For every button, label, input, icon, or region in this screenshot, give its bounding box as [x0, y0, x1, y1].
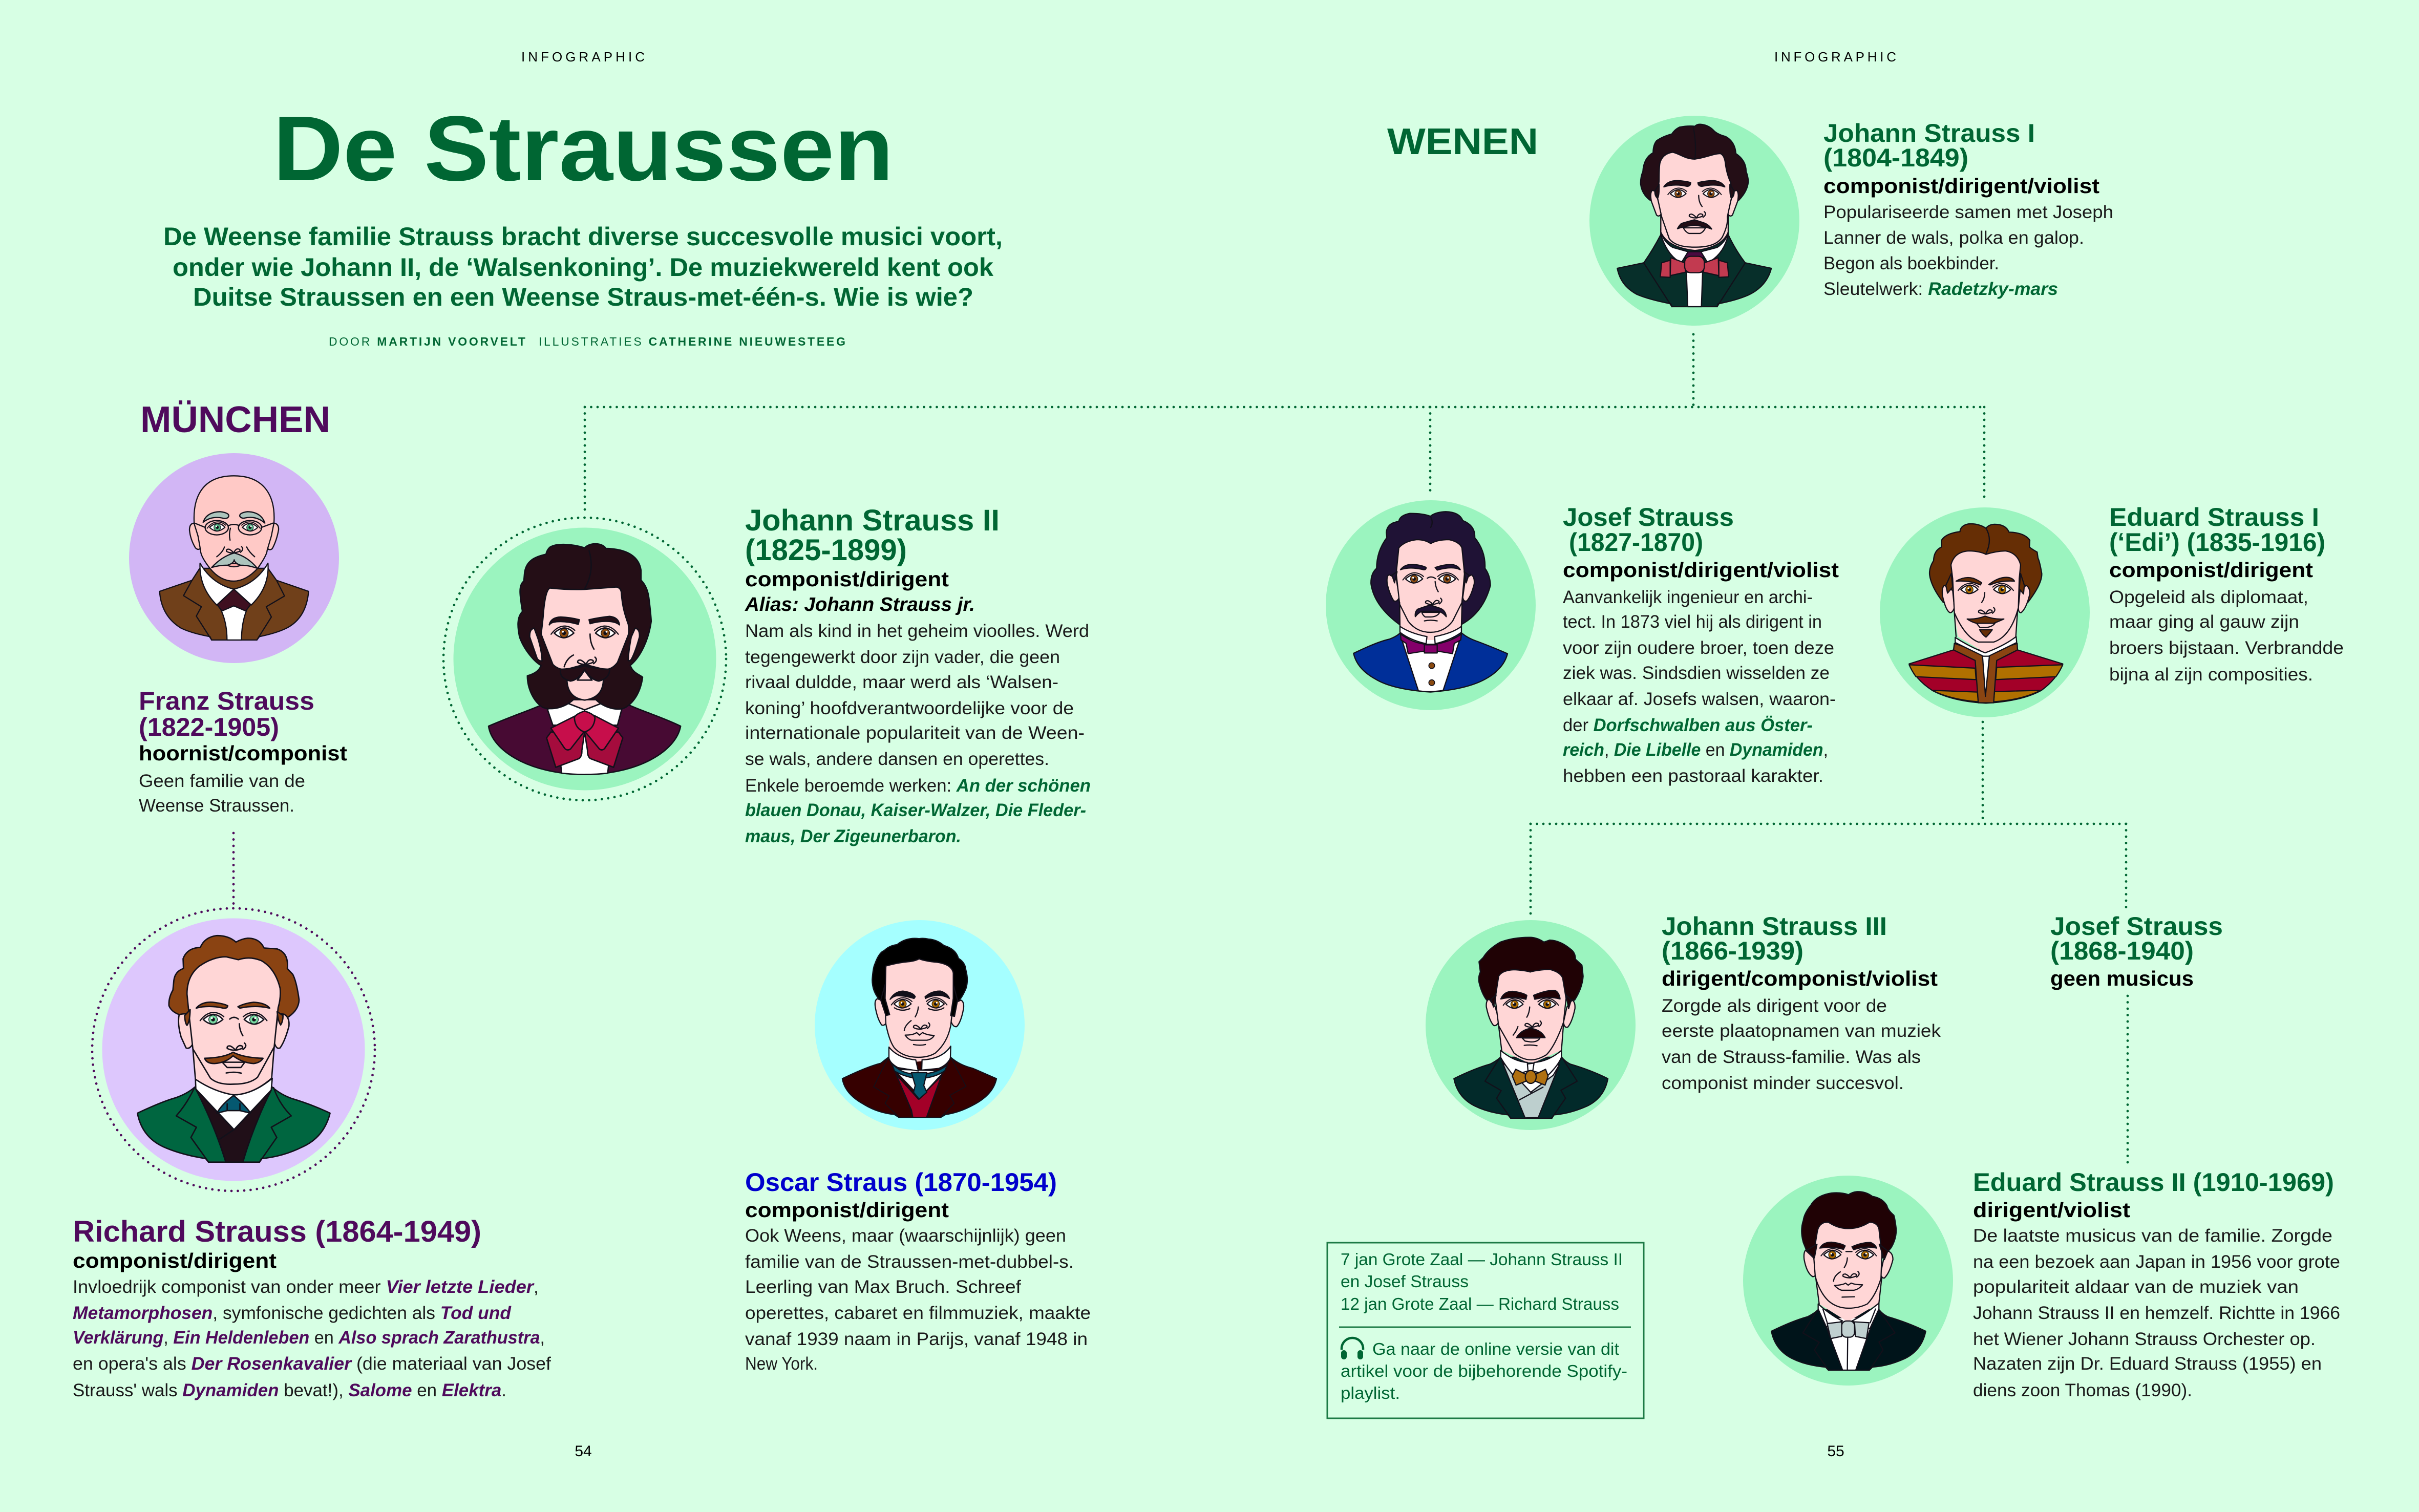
ears and face	[1487, 999, 1575, 1027]
face	[541, 587, 629, 669]
panel: Johann Strauss I bio: Johann Strauss I	[1823, 119, 2035, 147]
panel: Richard Strauss bio: Invloedrijk componist van onder meer Vier letzte Lieder ,	[73, 1277, 539, 1297]
panel: Eduard Strauss I bio	[2109, 503, 2344, 685]
hair	[1801, 1191, 1896, 1258]
panel: Johann Strauss III bio: van de Strauss-familie. Was als	[1662, 1047, 1921, 1067]
shirt	[196, 1078, 272, 1130]
panel: Johann Strauss II bio: tegengewerkt door zijn vader, die geen	[745, 647, 1060, 667]
panel: Oscar Straus bio: Oscar Straus (1870-1954)	[745, 1168, 1057, 1197]
panel: Johann Strauss I bio: Lanner de wals, polka en galop.	[1823, 228, 2084, 248]
callout: concert dates and playlist: playlist.	[1341, 1383, 1400, 1402]
panel: Oscar Straus bio: operettes, cabaret en filmmuziek, maakte	[745, 1303, 1091, 1323]
coat	[1454, 1057, 1608, 1118]
panel: Josef Strauss 1827 bio: tect. In 1873 viel hij als dirigent in	[1563, 612, 1822, 632]
panel: Eduard Strauss II bio: na een bezoek aan Japan in 1956 voor grote	[1973, 1252, 2340, 1272]
callout: concert dates and playlist: 12 jan Grote Zaal — Richard Strauss	[1341, 1294, 1619, 1313]
panel: Eduard Strauss I bio: componist/dirigent	[2109, 558, 2313, 582]
vest	[1502, 1061, 1559, 1118]
panel: Johann Strauss II bio: koning’ hoofdverantwoordelijke voor de	[745, 698, 1074, 718]
panel: Johann Strauss III bio: Zorgde als dirigent voor de	[1662, 996, 1887, 1016]
bow tie	[1827, 1322, 1869, 1338]
tie	[892, 1063, 947, 1078]
callout: concert dates and playlist: en Josef Strauss	[1341, 1272, 1469, 1291]
panel: Johann Strauss I bio	[1823, 119, 2113, 299]
portrait: Eduard Strauss I	[1880, 507, 2090, 717]
panel: Johann Strauss I bio: componist/dirigent/violist	[1823, 174, 2099, 198]
panel: Eduard Strauss II bio	[1973, 1168, 2340, 1400]
panel: Eduard Strauss II bio: Johann Strauss II en hemzelf. Richtte in 1966	[1973, 1303, 2340, 1323]
portrait: Johann Strauss III	[1426, 920, 1636, 1130]
panel: Eduard Strauss II bio: dirigent/violist	[1973, 1198, 2130, 1222]
callout: concert dates and playlist: 7 jan Grote Zaal — Johann Strauss II	[1341, 1250, 1623, 1269]
intro text	[163, 222, 1003, 311]
panel: Josef Strauss 1827 bio: elkaar af. Josefs walsen, waaron-	[1563, 689, 1836, 709]
section label right: INFOGRAPHIC: INFOGRAPHIC	[1774, 49, 1896, 65]
panel: Eduard Strauss I bio: Eduard Strauss I	[2109, 503, 2319, 531]
panel: Johann Strauss II bio: componist/dirigent	[745, 567, 949, 591]
portrait: Richard Strauss	[92, 908, 375, 1191]
panel: Johann Strauss III bio	[1662, 912, 1941, 1093]
panel: Eduard Strauss I bio: bijna al zijn composities.	[2109, 665, 2313, 685]
coat	[160, 568, 309, 640]
neck and collar	[889, 1033, 950, 1062]
panel: Franz Strauss bio: Franz Strauss	[139, 687, 314, 715]
panel: Johann Strauss II bio	[745, 504, 1091, 846]
coat	[842, 1057, 996, 1118]
panel: Johann Strauss II bio: internationale populariteit van de Ween-	[745, 723, 1085, 743]
panel: Josef Strauss 1868: geen musicus	[2050, 967, 2194, 990]
panel: Johann Strauss II bio: maus, Der Zigeunerbaron.	[745, 826, 961, 846]
ears and face	[1387, 575, 1474, 601]
panel: Eduard Strauss I bio: maar ging al gauw zijn	[2109, 612, 2299, 632]
glasses	[195, 523, 273, 527]
panel: Josef Strauss 1827 bio: Aanvankelijk ingenieur en archi-	[1563, 587, 1813, 607]
page number 54: 54	[575, 1443, 592, 1460]
moustache	[1517, 1028, 1545, 1038]
panel: Franz Strauss bio: (1822-1905)	[139, 713, 279, 741]
panel: Josef Strauss 1827 bio	[1563, 503, 1839, 786]
panel: Johann Strauss II bio: Nam als kind in het geheim vioolles. Werd	[745, 621, 1089, 641]
panel: Johann Strauss III bio: eerste plaatopnamen van muziek	[1662, 1021, 1941, 1041]
hair	[169, 935, 299, 1024]
panel: Oscar Straus bio: Leerling van Max Bruch. Schreef	[745, 1277, 1021, 1297]
hair	[1929, 524, 2042, 603]
intro text: onder wie Johann II, de ‘Walsenkoning’. De muziekwereld kent ook	[173, 253, 993, 282]
panel: Oscar Straus bio: vanaf 1939 naam in Parijs, vanaf 1948 in	[745, 1329, 1088, 1349]
neck and collar	[1499, 1026, 1563, 1062]
family tree connectors: Vienna	[585, 334, 2128, 1168]
panel: Franz Strauss bio: Geen familie van de	[139, 771, 305, 791]
vest	[896, 1074, 941, 1118]
panel: Richard Strauss bio: Richard Strauss (1864-1949)	[73, 1215, 481, 1248]
uniform	[1909, 650, 2063, 703]
moustache and goatee	[1967, 616, 2004, 623]
panel: Eduard Strauss I bio: Opgeleid als diplomaat,	[2109, 587, 2308, 607]
panel: Eduard Strauss I bio: broers bijstaan. Verbrandde	[2109, 638, 2344, 658]
hair	[1479, 938, 1583, 1000]
shirt	[1402, 638, 1460, 692]
portrait: Franz Strauss	[129, 453, 339, 663]
panel: Johann Strauss I bio: Populariseerde samen met Joseph	[1823, 202, 2113, 222]
panel: Johann Strauss II bio: Johann Strauss II	[745, 504, 1000, 537]
hair	[1371, 512, 1491, 625]
panel: Josef Strauss 1868: (1868-1940)	[2050, 936, 2194, 965]
panel: Oscar Straus bio: componist/dirigent	[745, 1198, 949, 1222]
hair	[1641, 124, 1748, 201]
hair	[872, 939, 967, 1012]
neck and collar	[1816, 1276, 1882, 1322]
panel: Josef Strauss 1827 bio: der Dorfschwalben aus Öster-	[1563, 715, 1813, 735]
coat	[137, 1087, 330, 1162]
ears and face	[875, 999, 964, 1027]
panel: Josef Strauss 1827 bio: reich, Die Libelle en Dynamiden,	[1563, 740, 1828, 760]
panel: Josef Strauss 1868: Josef Strauss	[2050, 912, 2223, 941]
panel: Eduard Strauss II bio: populariteit aldaar van de muziek van	[1973, 1277, 2299, 1297]
buttons	[1429, 663, 1435, 669]
bow	[546, 732, 623, 768]
bow tie	[1660, 258, 1729, 278]
coat	[1617, 235, 1771, 307]
panel: Franz Strauss bio	[139, 687, 347, 816]
intro text: Duitse Straussen en een Weense Straus-met-één-s. Wie is wie?	[193, 283, 973, 311]
collar	[200, 563, 268, 605]
panel: Johann Strauss II bio: rivaal duldde, maar werd als ‘Walsen-	[745, 672, 1058, 692]
tie	[217, 1096, 251, 1113]
panel: Eduard Strauss II bio: De laatste musicus van de familie. Zorgde	[1973, 1226, 2332, 1246]
mouth	[1835, 1283, 1862, 1290]
panel: Eduard Strauss II bio: het Wiener Johann Strauss Orchester op.	[1973, 1329, 2316, 1349]
moustache	[1415, 605, 1446, 616]
panel: Richard Strauss bio	[73, 1215, 551, 1400]
panel: Oscar Straus bio	[745, 1168, 1091, 1374]
panel: Johann Strauss II bio: blauen Donau, Kaiser-Walzer, Die Fleder-	[745, 800, 1086, 820]
panel: Franz Strauss bio: hoornist/componist	[139, 741, 347, 765]
bow tie	[1401, 634, 1461, 654]
collar	[1661, 229, 1728, 263]
panel: Franz Strauss bio: Weense Straussen.	[139, 796, 294, 816]
panel: Richard Strauss bio: Verklärung, Ein Heldenleben en Also sprach Zarathustra,	[73, 1328, 545, 1348]
panel: Eduard Strauss I bio: (‘Edi’) (1835-1916)	[2109, 528, 2325, 557]
title: De Straussen	[273, 97, 894, 200]
family connector: Munich	[232, 833, 235, 906]
panel: Richard Strauss bio: Metamorphosen, symfonische gedichten als Tod und	[73, 1303, 512, 1323]
ears and face	[1942, 585, 2030, 613]
shirt	[1507, 1063, 1559, 1092]
panel: Johann Strauss I bio: Begon als boekbinder.	[1823, 253, 1999, 273]
moustache	[211, 553, 258, 568]
coat	[489, 704, 681, 775]
ears and head	[189, 523, 279, 550]
panel: Johann Strauss I bio: Sleutelwerk: Radetzky-mars	[1823, 279, 2058, 299]
hair and beard	[518, 544, 651, 709]
panel: Oscar Straus bio: familie van de Straussen-met-dubbel-s.	[745, 1252, 1074, 1272]
callout: concert dates and playlist: Ga naar de online versie van dit	[1372, 1339, 1619, 1358]
panel: Josef Strauss 1827 bio: hebben een pastoraal karakter.	[1563, 766, 1823, 786]
panel: Eduard Strauss II bio: Nazaten zijn Dr. Eduard Strauss (1955) en	[1973, 1354, 2322, 1374]
coat	[1353, 633, 1508, 692]
shirt	[1823, 1317, 1874, 1370]
bow tie	[1512, 1069, 1548, 1085]
panel: Johann Strauss III bio: dirigent/componist/violist	[1662, 967, 1938, 990]
section label left: INFOGRAPHIC: INFOGRAPHIC	[521, 49, 645, 65]
moustache	[1678, 220, 1712, 229]
tie	[217, 589, 251, 611]
panel: Johann Strauss III bio: (1866-1939)	[1662, 936, 1803, 965]
coat	[1771, 1310, 1926, 1370]
panel: Johann Strauss III bio: Johann Strauss III	[1662, 912, 1887, 941]
panel: Richard Strauss bio: en opera's als Der Rosenkavalier (die materiaal van Josef	[73, 1354, 551, 1374]
panel: Richard Strauss bio: Strauss' wals Dynamiden bevat!), Salome en Elektra.	[73, 1380, 506, 1400]
ears and face	[1804, 1250, 1893, 1278]
panel: Josef Strauss 1827 bio: ziek was. Sindsdien wisselden ze	[1563, 663, 1830, 683]
panel: Eduard Strauss II bio: diens zoon Thomas (1990).	[1973, 1380, 2192, 1400]
panel: Josef Strauss 1827 bio: voor zijn oudere broer, toen deze	[1563, 638, 1834, 658]
panel: Oscar Straus bio: Ook Weens, maar (waarschijnlijk) geen	[745, 1226, 1066, 1246]
panel: Richard Strauss bio: componist/dirigent	[73, 1249, 277, 1272]
moustache	[577, 670, 592, 680]
portrait: Josef Strauss 1827	[1326, 500, 1536, 710]
ears and face	[1651, 190, 1738, 216]
icon: headphones	[1341, 1338, 1363, 1359]
portrait: Johann Strauss II	[443, 518, 726, 800]
city heading: München: MÜNCHEN	[140, 399, 330, 440]
portrait: Oscar Straus	[815, 920, 1025, 1130]
panel: Johann Strauss II bio: Alias: Johann Strauss jr.	[745, 594, 975, 615]
mouth	[905, 1033, 934, 1040]
moustache	[205, 1052, 263, 1063]
panel: Johann Strauss II bio: Enkele beroemde werken: An der schönen	[745, 776, 1091, 796]
panel: Johann Strauss II bio: se wals, andere dansen en operettes.	[745, 749, 1049, 769]
panel: Johann Strauss I bio: (1804-1849)	[1823, 143, 1968, 172]
panel: Johann Strauss II bio: (1825-1899)	[745, 534, 907, 567]
panel: Johann Strauss III bio: componist minder succesvol.	[1662, 1073, 1904, 1093]
panel: Josef Strauss 1827 bio: (1827-1870)	[1569, 528, 1703, 557]
panel: Oscar Straus bio: New York.	[745, 1354, 818, 1374]
neck and collar	[1399, 601, 1462, 640]
panel: Josef Strauss 1868	[2050, 912, 2223, 990]
neck and collar	[1955, 611, 2018, 653]
callout: concert dates and playlist	[1327, 1243, 1644, 1418]
intro text: De Weense familie Strauss bracht diverse succesvolle musici voort,	[163, 222, 1003, 251]
panel: Eduard Strauss II bio: Eduard Strauss II (1910-1969)	[1973, 1168, 2334, 1197]
portrait: Johann Strauss I	[1589, 116, 1799, 326]
page number 55: 55	[1827, 1443, 1844, 1460]
byline: DOOR MARTIJN VOORVELT ILLUSTRATIES CATHERINE NIEUWESTEEG	[329, 335, 845, 348]
city heading: Wenen: WENEN	[1387, 121, 1538, 162]
neck, ears, face	[193, 1047, 274, 1095]
panel: Josef Strauss 1827 bio: Josef Strauss	[1563, 503, 1734, 531]
panel: Josef Strauss 1827 bio: componist/dirigent/violist	[1563, 558, 1839, 582]
shirt	[894, 1069, 945, 1099]
vest	[196, 1089, 271, 1162]
portrait: Eduard Strauss II	[1743, 1176, 1953, 1386]
callout: concert dates and playlist: artikel voor de bijbehorende Spotify-	[1341, 1361, 1627, 1380]
